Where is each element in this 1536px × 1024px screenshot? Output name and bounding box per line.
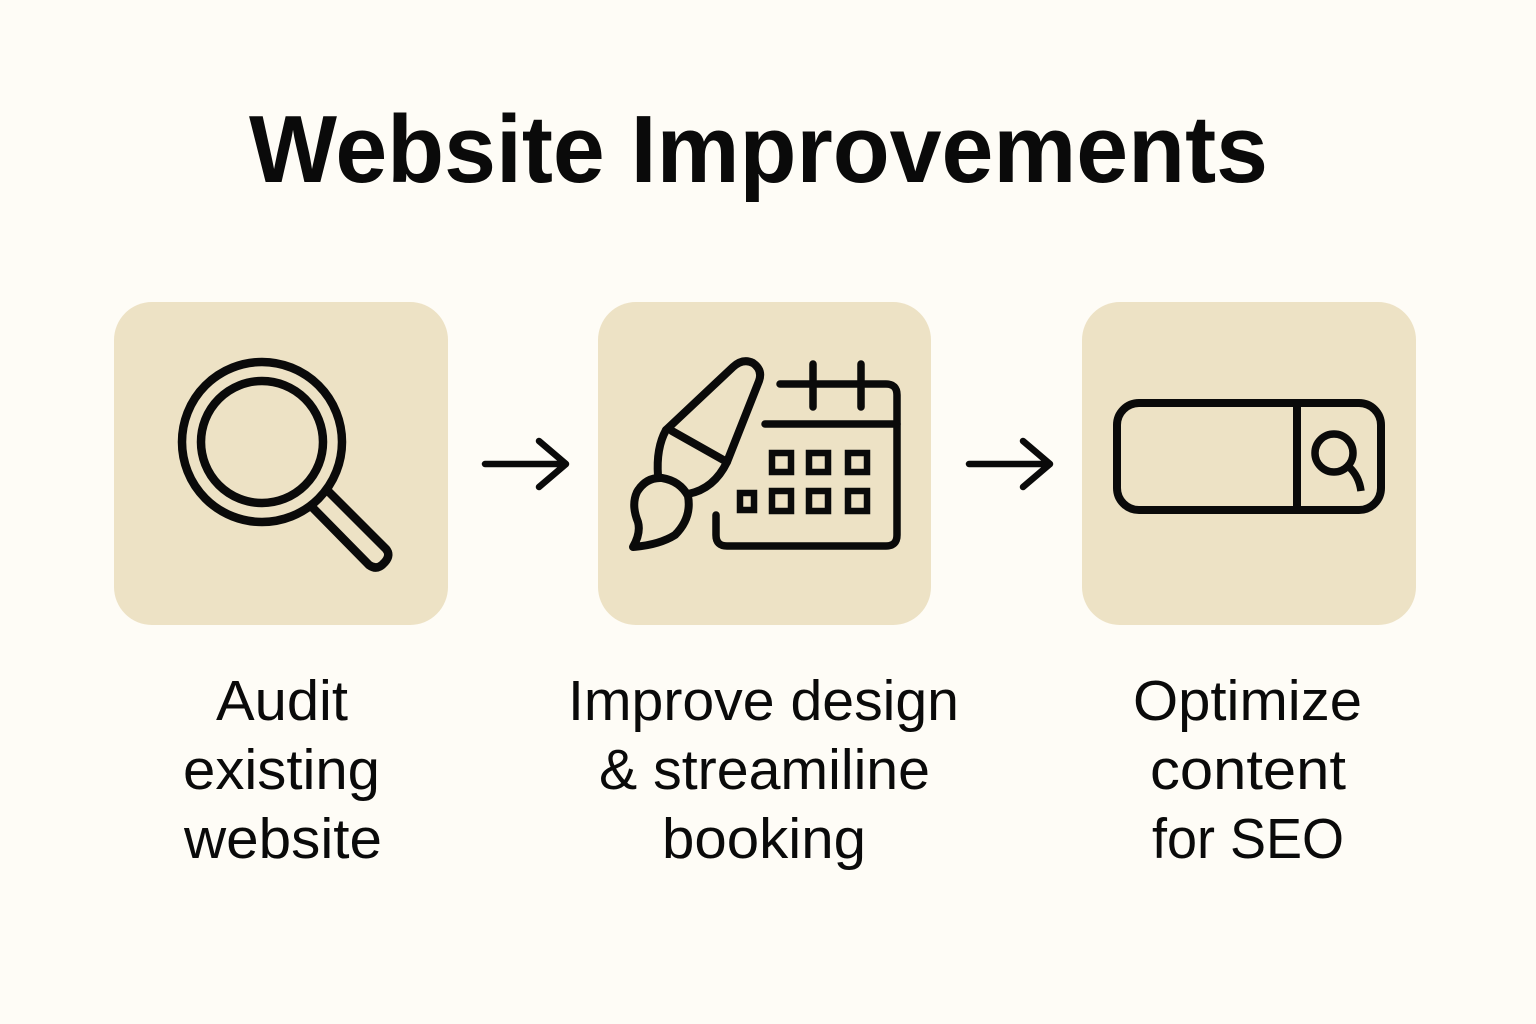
label: audit existing website — [183, 669, 382, 871]
label: improve design and streamline booking — [568, 669, 959, 871]
icon: calendar — [716, 364, 897, 546]
icon: paintbrush — [633, 361, 760, 547]
label: improve design and streamline booking: booking — [662, 807, 866, 871]
label: optimize content for SEO — [1133, 669, 1362, 871]
icon: magnifying glass — [182, 362, 388, 568]
label: optimize content for SEO: for SEO — [1152, 807, 1344, 871]
panel: SEO icon card — [1082, 302, 1416, 625]
label: optimize content for SEO: Optimize — [1133, 669, 1362, 733]
arrow: design to SEO — [969, 441, 1050, 487]
label: improve design and streamline booking: & streamiline — [599, 738, 930, 802]
icon: search bar — [1117, 403, 1381, 510]
panel: design icon card — [598, 302, 931, 625]
title: Website Improvements — [249, 96, 1268, 203]
arrow: audit to design — [485, 441, 566, 487]
label: optimize content for SEO: content — [1150, 738, 1346, 802]
label: improve design and streamline booking: Improve design — [568, 669, 959, 733]
label: audit existing website: website — [183, 807, 382, 871]
label: audit existing website: Audit — [216, 669, 348, 733]
label: audit existing website: existing — [183, 738, 380, 802]
panel: audit icon card — [114, 302, 448, 625]
